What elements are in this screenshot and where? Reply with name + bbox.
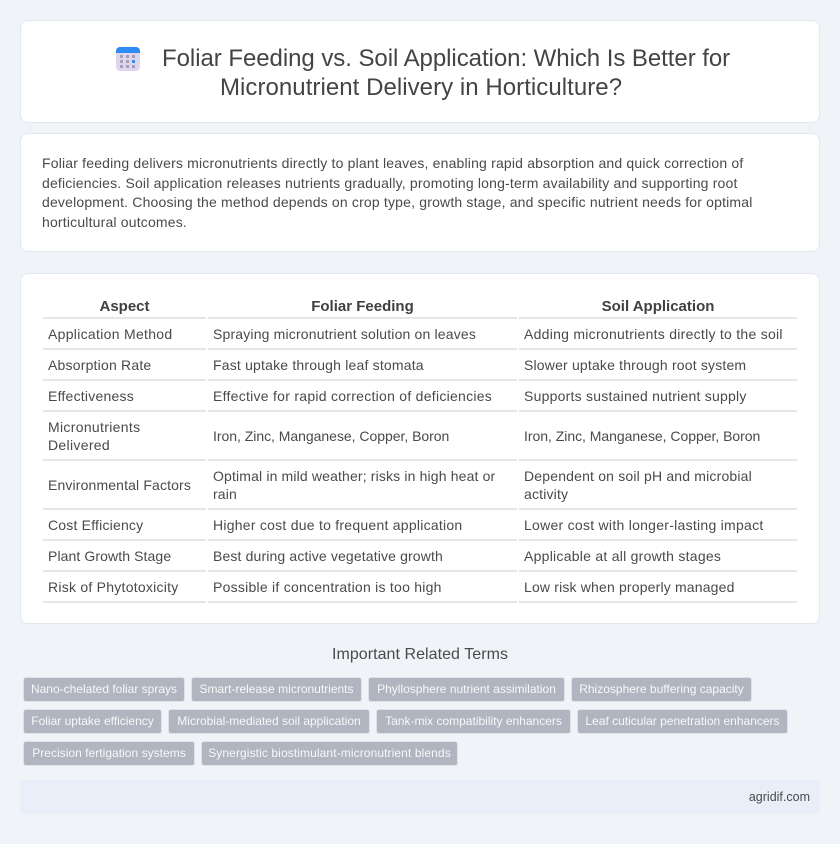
tag — [23, 677, 185, 702]
related terms heading: Important Related Terms — [332, 646, 508, 663]
description text: development. Choosing the method depends on crop type, growth stage, and specific nutrient needs for optimal — [42, 194, 753, 210]
related terms tags — [23, 677, 788, 766]
footer bar — [20, 780, 820, 814]
tag: Rhizosphere buffering capacity — [579, 682, 744, 696]
description text: deficiencies. Soil application releases nutrients gradually, promoting long-term availability and supporting root — [42, 175, 738, 191]
row: cost efficiency: Higher cost due to frequent application — [213, 517, 462, 533]
row: cost efficiency — [48, 517, 764, 533]
description text: horticultural outcomes. — [42, 214, 187, 230]
tag — [376, 709, 571, 734]
tag: Phyllosphere nutrient assimilation — [377, 682, 556, 696]
row: effectiveness: Effectiveness — [48, 388, 134, 404]
tag — [201, 741, 458, 766]
title — [162, 45, 730, 101]
title: Foliar Feeding vs. Soil Application: Which Is Better for — [162, 45, 730, 72]
tag — [191, 677, 362, 702]
row: effectiveness: Supports sustained nutrient supply — [524, 388, 747, 404]
column headings: Aspect — [99, 298, 150, 315]
row: micronutrients delivered — [48, 419, 760, 453]
tag: Foliar uptake efficiency — [31, 714, 154, 728]
comparison table — [43, 298, 797, 603]
tag — [368, 677, 565, 702]
column headings: Soil Application — [602, 298, 714, 315]
row: environmental factors: Environmental Factors — [48, 477, 191, 493]
tag — [168, 709, 370, 734]
row: application method — [48, 326, 783, 342]
row: micronutrients delivered: Micronutrients — [48, 419, 140, 435]
row: environmental factors — [48, 468, 752, 502]
tag: Smart-release micronutrients — [199, 682, 354, 696]
row: application method: Adding micronutrients directly to the soil — [524, 326, 783, 342]
header panel — [20, 20, 820, 123]
row: absorption rate: Fast uptake through leaf stomata — [213, 357, 424, 373]
column headings — [99, 298, 714, 315]
row: application method: Spraying micronutrient solution on leaves — [213, 326, 476, 342]
footer source text: agridif.com — [749, 790, 810, 804]
tag — [23, 741, 195, 766]
row: micronutrients delivered: Iron, Zinc, Manganese, Copper, Boron — [213, 428, 449, 444]
row: environmental factors: rain — [213, 486, 237, 502]
row: absorption rate: Slower uptake through root system — [524, 357, 746, 373]
row: micronutrients delivered: Delivered — [48, 437, 110, 453]
row: cost efficiency: Lower cost with longer-lasting impact — [524, 517, 764, 533]
description panel — [20, 133, 820, 252]
row: risk of phytotoxicity: Low risk when properly managed — [524, 579, 735, 595]
tag: Synergistic biostimulant-micronutrient blends — [208, 746, 451, 760]
tag — [571, 677, 752, 702]
row: absorption rate: Absorption Rate — [48, 357, 151, 373]
row: environmental factors: Optimal in mild weather; risks in high heat or — [213, 468, 495, 484]
row: risk of phytotoxicity: Risk of Phytotoxicity — [48, 579, 179, 595]
description text — [42, 155, 753, 230]
tag: Microbial-mediated soil application — [177, 714, 361, 728]
row: micronutrients delivered: Iron, Zinc, Manganese, Copper, Boron — [524, 428, 760, 444]
row: plant growth stage — [48, 548, 721, 564]
comparison table panel — [20, 273, 820, 624]
tag: Precision fertigation systems — [32, 746, 186, 760]
row: environmental factors: Dependent on soil pH and microbial — [524, 468, 752, 484]
row: effectiveness: Effective for rapid correction of deficiencies — [213, 388, 492, 404]
description text: Foliar feeding delivers micronutrients directly to plant leaves, enabling rapid absorption and quick correction of — [42, 155, 743, 171]
row: risk of phytotoxicity: Possible if concentration is too high — [213, 579, 442, 595]
row: effectiveness — [48, 388, 747, 404]
row: plant growth stage: Plant Growth Stage — [48, 548, 171, 564]
tag: Leaf cuticular penetration enhancers — [585, 714, 780, 728]
row: environmental factors: activity — [524, 486, 568, 502]
tag: Tank-mix compatibility enhancers — [385, 714, 562, 728]
row: cost efficiency: Cost Efficiency — [48, 517, 143, 533]
tag — [577, 709, 788, 734]
row: plant growth stage: Best during active vegetative growth — [213, 548, 443, 564]
title: Micronutrient Delivery in Horticulture? — [220, 74, 622, 101]
tag: Nano-chelated foliar sprays — [31, 682, 177, 696]
row: absorption rate — [48, 357, 746, 373]
icon: calendar — [116, 47, 140, 71]
column headings: Foliar Feeding — [311, 298, 414, 315]
row: application method: Application Method — [48, 326, 172, 342]
tag — [23, 709, 162, 734]
row: risk of phytotoxicity — [48, 579, 735, 595]
row: plant growth stage: Applicable at all growth stages — [524, 548, 721, 564]
